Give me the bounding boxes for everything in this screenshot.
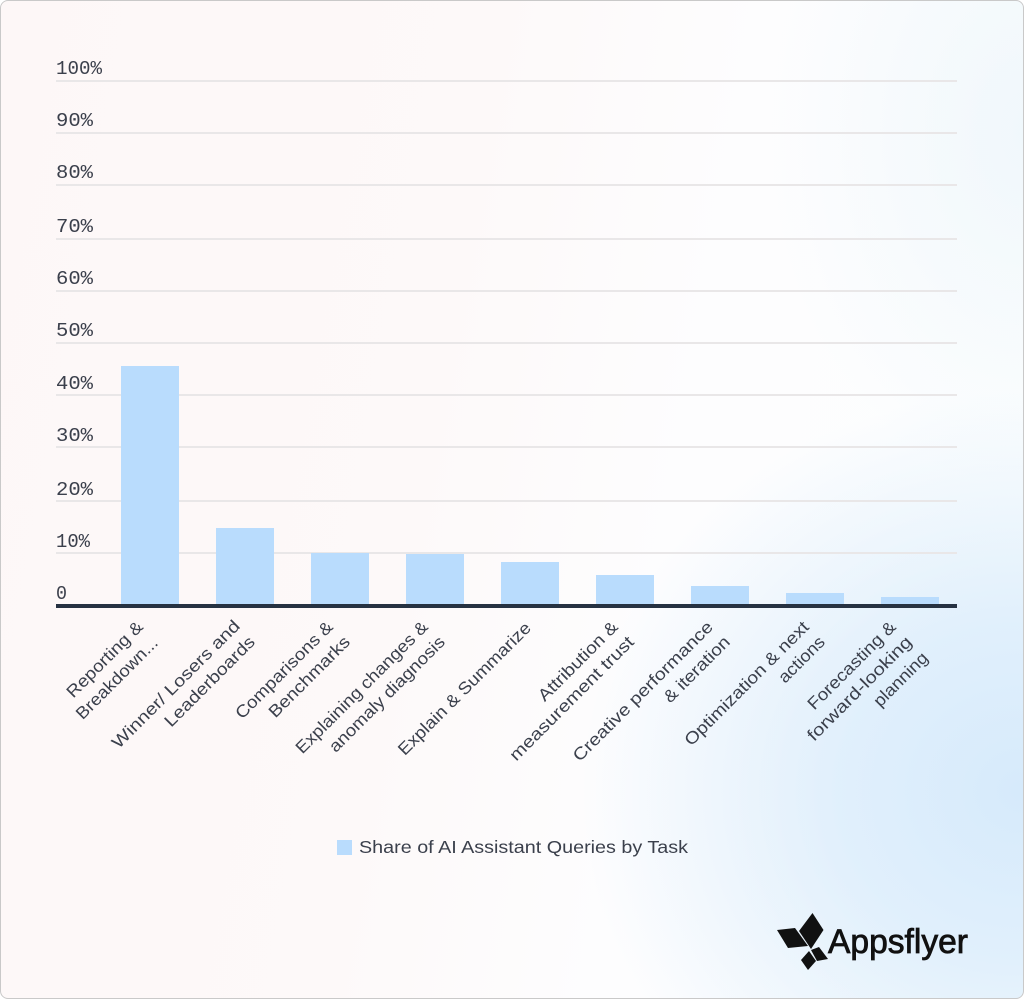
legend: Share of AI Assistant Queries by Task xyxy=(359,837,688,857)
x-axis category labels: Creative performance xyxy=(569,617,717,765)
x-axis category labels: Optimization & next xyxy=(681,617,813,750)
bars xyxy=(121,366,939,605)
y-axis labels: 70% xyxy=(56,216,94,238)
y-axis labels: 0 xyxy=(56,583,67,605)
x-axis category labels: Reporting & xyxy=(63,617,147,702)
x-axis category labels: Winner/ Losers and xyxy=(108,616,244,752)
logo: AppsFlyer: Appsflyer xyxy=(828,923,968,961)
y-axis labels: 40% xyxy=(56,373,94,395)
x-axis category labels: Breakdown... xyxy=(72,633,162,723)
x-axis line xyxy=(56,604,957,608)
y-axis labels: 10% xyxy=(56,531,91,553)
x-axis category labels: Attribution & xyxy=(534,617,622,705)
x-axis category labels: Leaderboards xyxy=(161,632,259,731)
y-axis labels: 100% xyxy=(56,58,103,80)
x-axis category labels: measurement trust xyxy=(506,632,638,765)
y-axis labels: 50% xyxy=(56,320,94,342)
x-axis category labels: & iteration xyxy=(660,632,734,707)
y-axis labels: 80% xyxy=(56,162,94,184)
y-axis labels: 90% xyxy=(56,110,94,132)
x-axis category labels: Explain & Summarize xyxy=(394,618,535,759)
x-axis category labels: anomaly diagnosis xyxy=(325,632,449,756)
y-axis labels xyxy=(56,58,103,605)
x-axis category labels: Forecasting & xyxy=(804,617,900,714)
x-axis category labels: Comparisons & xyxy=(231,617,337,723)
x-axis category labels: planning xyxy=(870,648,932,711)
icon: AppsFlyer diamonds xyxy=(777,913,828,970)
y-axis gridlines xyxy=(56,81,957,553)
x-axis category labels: actions xyxy=(774,632,829,687)
x-axis category labels: forward-looking xyxy=(803,632,916,745)
y-axis labels: 60% xyxy=(56,268,94,290)
x-axis category labels: Explaining changes & xyxy=(292,617,432,757)
x-axis category labels: Benchmarks xyxy=(265,632,354,721)
y-axis labels: 20% xyxy=(56,479,94,501)
y-axis labels: 30% xyxy=(56,425,94,447)
x-axis category labels xyxy=(63,616,932,765)
logo: AppsFlyer xyxy=(777,913,968,970)
